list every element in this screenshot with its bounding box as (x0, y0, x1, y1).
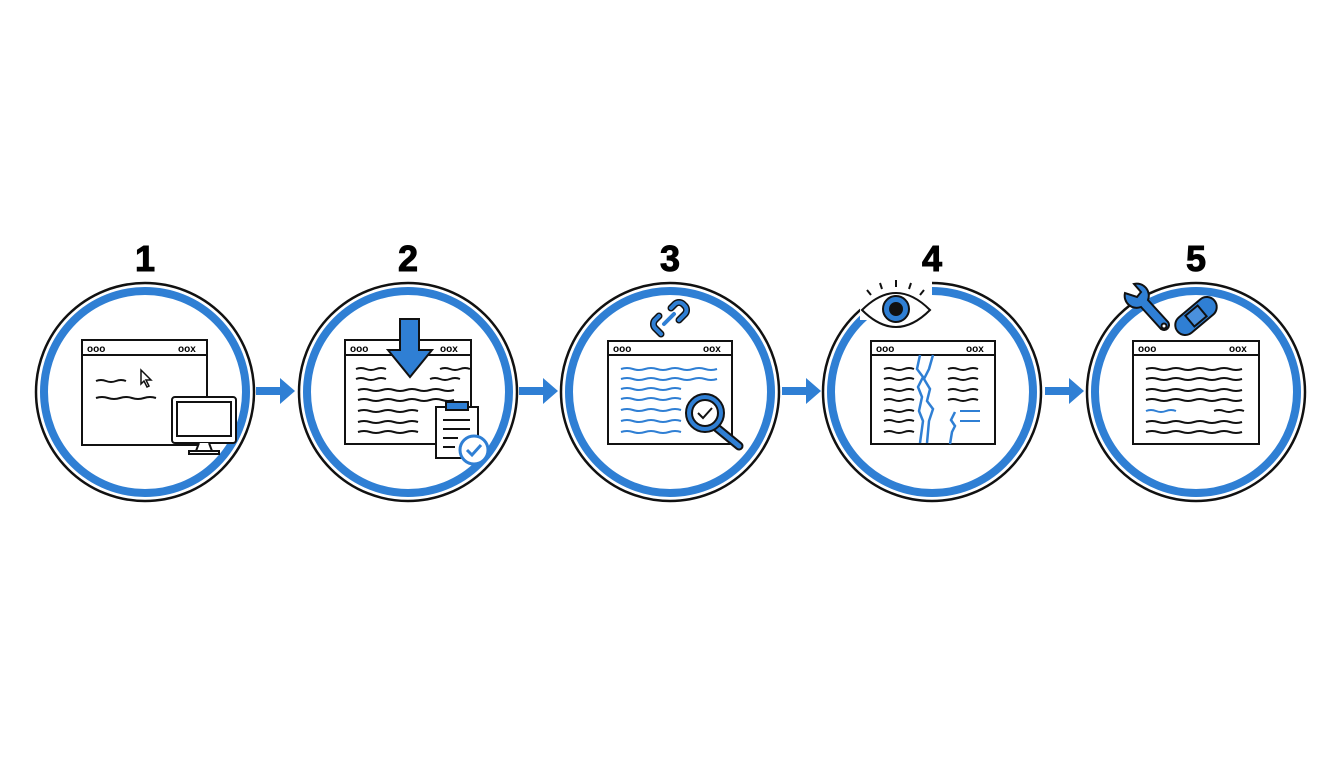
icon: repaired window: ooo (1138, 344, 1156, 355)
arrow 3-4 (782, 378, 821, 404)
icon: window with blue text (608, 341, 732, 444)
icon: window with text (345, 340, 471, 444)
icon: download arrow (388, 319, 432, 377)
icon: chain link (653, 302, 687, 334)
arrow 4-5 (1045, 378, 1084, 404)
number 5: 5 (1186, 238, 1206, 279)
icon: monitor (172, 397, 236, 454)
icon: bandage (1171, 293, 1221, 339)
arrow 1-2 (256, 378, 295, 404)
circle 3 (561, 283, 779, 501)
icon: clipboard with check (436, 402, 488, 464)
number 3: 3 (660, 238, 680, 279)
icon: cracked window: ooo (876, 344, 894, 355)
step 5 (1087, 238, 1305, 501)
step 1 (36, 238, 254, 501)
circle 5 (1087, 283, 1305, 501)
number 2: 2 (398, 238, 418, 279)
icon: cracked window: oox (966, 344, 984, 355)
number 1: 1 (135, 238, 155, 279)
icon: cracked window (871, 341, 995, 444)
icon: browser window with cursor: oox (178, 344, 196, 355)
icon: window with blue text: oox (703, 344, 721, 355)
circle 1 (36, 283, 254, 501)
icon: wrench (1125, 284, 1169, 330)
icon: window with text: oox (440, 344, 458, 355)
icon: repaired window: oox (1229, 344, 1247, 355)
icon: repaired window (1133, 341, 1259, 444)
icon: magnifier with check (686, 394, 739, 446)
icon: window with text: ooo (350, 344, 368, 355)
icon: eye (860, 280, 932, 327)
icon: browser window with cursor (82, 340, 207, 445)
step 4 (823, 238, 1041, 501)
step 3 (561, 238, 779, 501)
step 2 (299, 238, 517, 501)
icon: browser window with cursor: ooo (87, 344, 105, 355)
arrow 2-3 (519, 378, 558, 404)
number 4: 4 (922, 238, 942, 279)
circle 4 (823, 283, 1041, 501)
circle 2 (299, 283, 517, 501)
icon: window with blue text: ooo (613, 344, 631, 355)
